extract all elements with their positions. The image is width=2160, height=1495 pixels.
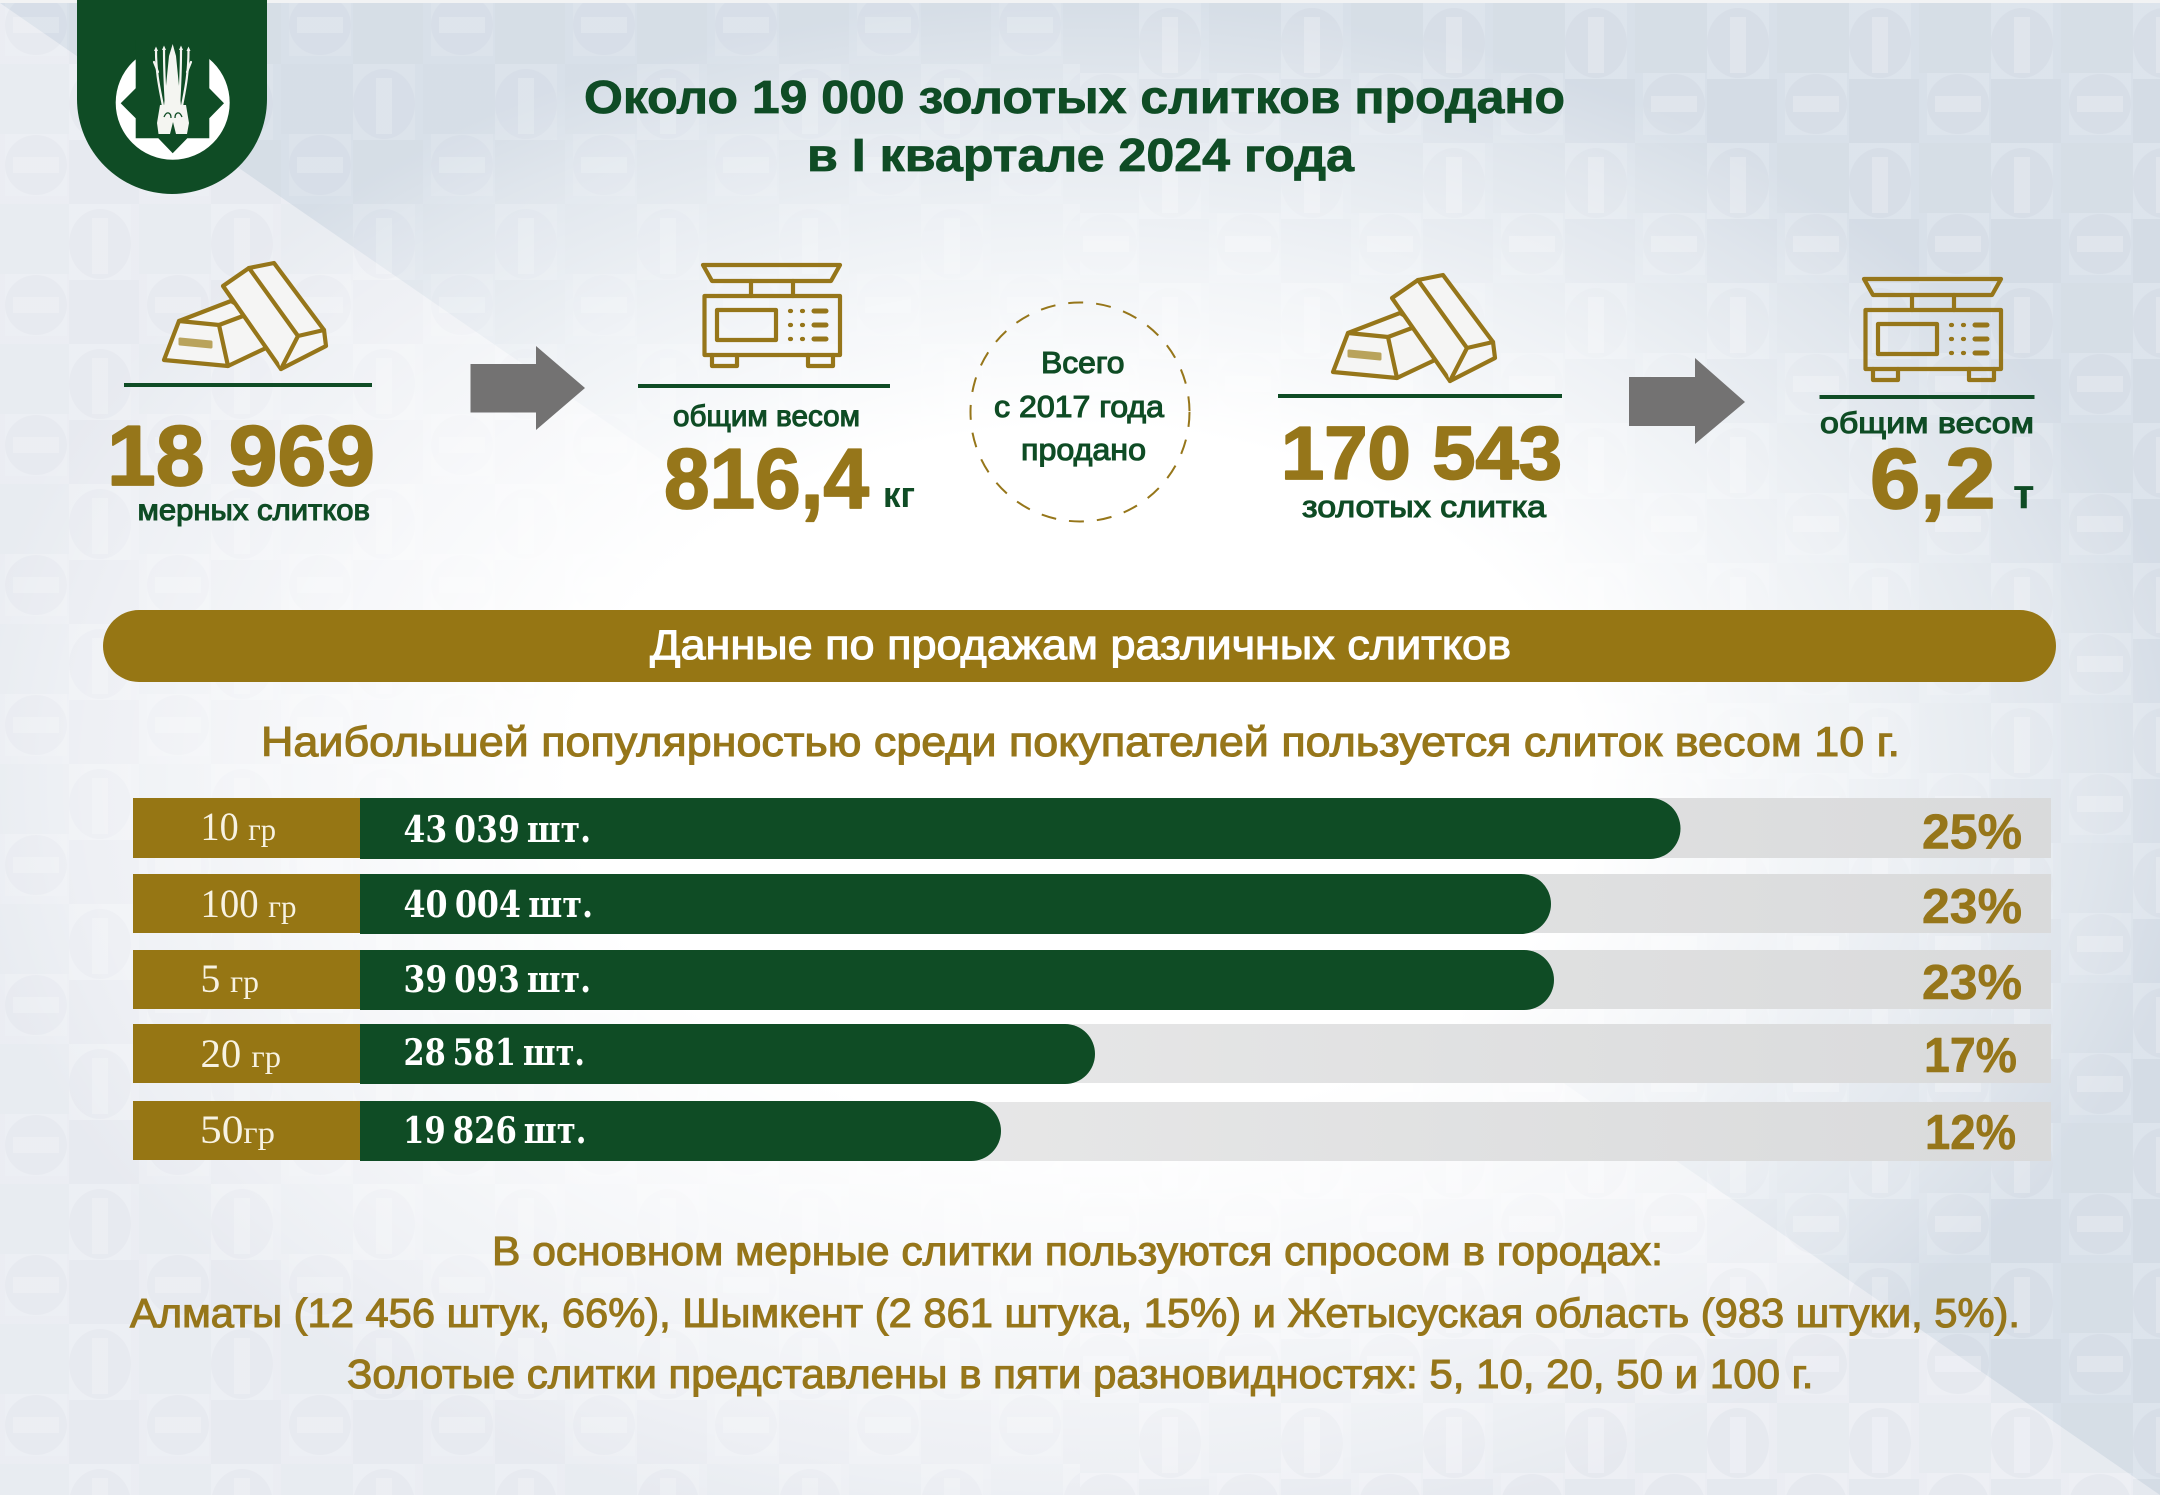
stat: total weight 816,4 kg: [638, 265, 915, 527]
stat: total weight 6,2 t: общим весом: [1820, 407, 2034, 440]
row: 100 g: [133, 874, 2051, 934]
stat: total weight 816,4 kg: 816,4: [664, 432, 869, 527]
row: 20 g: 20 гр: [200, 1031, 281, 1076]
row: 50 g: 19 826 шт.: [403, 1110, 586, 1152]
row: 5 g: [133, 950, 2051, 1010]
stat: total weight 816,4 kg: кг: [883, 474, 915, 515]
row: 10 g: 43 039 шт.: [404, 809, 591, 851]
bottom text block: Алматы (12 456 штук, 66%), Шымкент (2 861 штука, 15%) и Жетысуская область (983 штуки, 5%).: [130, 1290, 2020, 1336]
row: 100 g: 40 004 шт.: [404, 884, 593, 926]
icon: scales: [703, 265, 840, 366]
callout: dashed circle, total since 2017: продано: [1021, 432, 1146, 467]
row: 50 g: [133, 1101, 2051, 1161]
section heading pill: Данные по продажам различных слитков: [650, 621, 1511, 668]
stat: 170 543 gold bars: золотых слитка: [1302, 489, 1547, 524]
callout: dashed circle, total since 2017: [970, 302, 1190, 522]
bottom text block: [130, 1228, 2020, 1397]
row: 10 g: 10 гр: [200, 804, 276, 849]
title: Около 19 000 золотых слитков продано: [584, 71, 1565, 123]
row: 5 g: 5 гр: [200, 956, 259, 1001]
stat: total weight 6,2 t: [1820, 279, 2034, 527]
bottom text block: Золотые слитки представлены в пяти разновидностях: 5, 10, 20, 50 и 100 г.: [347, 1351, 1814, 1397]
row: 50 g: 50гр: [200, 1107, 275, 1152]
stat: total weight 6,2 t: т: [2013, 470, 2034, 517]
icon: gold bars: [164, 263, 326, 369]
section heading pill: [103, 610, 2056, 682]
callout: dashed circle, total since 2017: Всего: [1041, 345, 1124, 380]
row: 20 g: 28 581 шт.: [404, 1032, 585, 1074]
row: 20 g: 17%: [1924, 1029, 2017, 1083]
row: 5 g: 39 093 шт.: [404, 959, 591, 1001]
subtitle: Наибольшей популярностью среди покупателей пользуется слиток весом 10 г.: [261, 718, 1900, 765]
row: 20 g: [133, 1024, 2051, 1084]
stat: 18 969 measured bars: мерных слитков: [138, 494, 370, 527]
stat: 170 543 gold bars: [1278, 275, 1562, 524]
row: 100 g: 23%: [1922, 880, 2022, 934]
stat: total weight 6,2 t: 6,2: [1870, 432, 1996, 527]
title: [584, 71, 1565, 181]
arrow: [1629, 358, 1745, 444]
row: 10 g: [133, 798, 2051, 860]
stat: total weight 816,4 kg: общим весом: [673, 400, 860, 433]
title: в I квартале 2024 года: [807, 129, 1354, 181]
stat: 18 969 measured bars: [107, 263, 375, 527]
row: 50 g: 12%: [1925, 1106, 2016, 1160]
stat: 170 543 gold bars: 170 543: [1281, 411, 1562, 495]
bar chart: sales by bar weight: [133, 798, 2051, 1161]
row: 10 g: 25%: [1922, 806, 2022, 860]
icon: scales: [1864, 279, 2001, 380]
callout: dashed circle, total since 2017: с 2017 года: [994, 389, 1165, 424]
row: 5 g: 23%: [1922, 956, 2022, 1010]
arrow: [470, 346, 585, 430]
stat: 18 969 measured bars: 18 969: [107, 409, 375, 504]
bottom text block: В основном мерные слитки пользуются спросом в городах:: [492, 1228, 1663, 1274]
logo: green shield with white emblem: [77, 0, 267, 194]
icon: gold bars: [1333, 275, 1495, 381]
row: 100 g: 100 гр: [200, 881, 296, 926]
